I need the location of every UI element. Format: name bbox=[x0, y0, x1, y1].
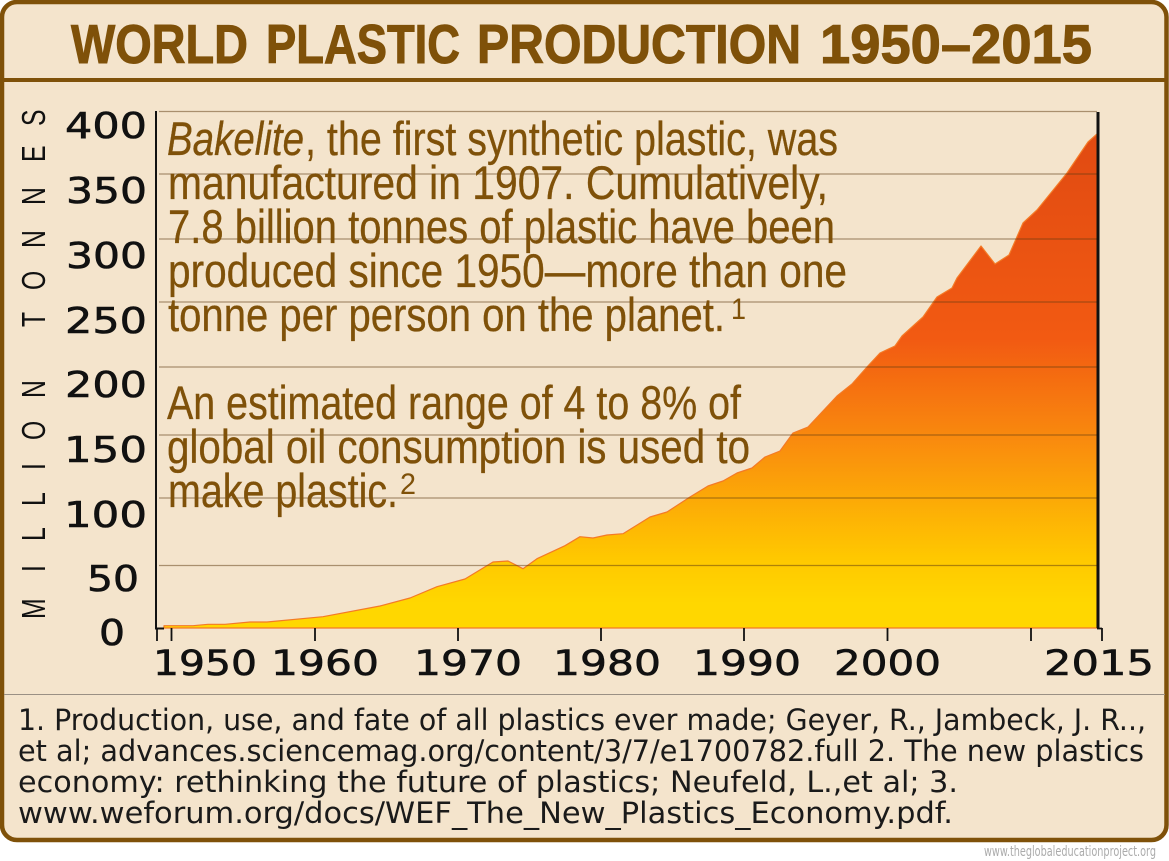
y axis labels: 250 bbox=[65, 301, 147, 342]
y axis labels bbox=[64, 106, 147, 654]
text block: Bakelite history: Bakelite bbox=[167, 112, 304, 165]
gridlines bbox=[159, 112, 1097, 566]
text block: oil consumption: An estimated range of 4 to 8% of bbox=[167, 376, 742, 429]
footer divider bbox=[4, 694, 1165, 696]
chart: production area bbox=[156, 111, 1102, 641]
title: PRODUCTION bbox=[477, 14, 801, 75]
y axis labels: 150 bbox=[64, 430, 147, 471]
x axis labels: 1990 bbox=[693, 644, 801, 684]
text block: Bakelite history: 1 bbox=[731, 293, 746, 326]
y axis labels: 100 bbox=[64, 495, 147, 536]
axes and ticks bbox=[156, 111, 1102, 641]
y axis labels: 0 bbox=[99, 613, 125, 654]
y axis labels: 400 bbox=[65, 106, 147, 147]
x axis labels: 1980 bbox=[553, 644, 661, 684]
title: WORLD bbox=[71, 14, 248, 75]
area series bbox=[164, 134, 1097, 628]
x axis labels: 2000 bbox=[834, 644, 941, 684]
footnotes: 1. Production, use, and fate of all plastics ever made; Geyer, R., Jambeck, J. R.., bbox=[18, 703, 1146, 737]
y axis labels: 200 bbox=[65, 365, 147, 406]
y axis labels: 350 bbox=[66, 171, 147, 212]
y axis labels: 50 bbox=[87, 559, 139, 600]
footnotes: www.weforum.org/docs/WEF_The_New_Plastics_Economy.pdf. bbox=[18, 796, 953, 830]
text block: Bakelite history: manufactured in 1907. Cumulatively, bbox=[168, 156, 828, 209]
x axis labels: 1960 bbox=[271, 644, 379, 684]
x axis labels: 1950 bbox=[153, 644, 257, 684]
text block: oil consumption bbox=[167, 376, 750, 517]
text block: oil consumption: make plastic. bbox=[168, 464, 398, 517]
text block: Bakelite history bbox=[167, 112, 847, 341]
title divider bbox=[4, 78, 1165, 82]
title: 1950–2015 bbox=[820, 14, 1092, 75]
title bbox=[71, 14, 1092, 75]
y axis labels: 300 bbox=[66, 236, 147, 277]
text block: oil consumption: global oil consumption is used to bbox=[167, 420, 750, 473]
footnotes: et al; advances.sciencemag.org/content/3/7/e1700782.full 2. The new plastics bbox=[18, 734, 1144, 768]
x axis labels bbox=[153, 644, 1154, 684]
text block: Bakelite history: tonne per person on the planet. bbox=[168, 288, 725, 341]
footnotes bbox=[18, 703, 1146, 830]
text block: oil consumption: 2 bbox=[400, 468, 416, 501]
y axis title: MILLION TONNES bbox=[17, 109, 53, 619]
text block: Bakelite history: 7.8 billion tonnes of plastic have been bbox=[168, 200, 835, 253]
x axis labels: 2015 bbox=[1044, 644, 1154, 684]
text block: Bakelite history: , the first synthetic plastic, was bbox=[305, 112, 838, 165]
title: PLASTIC bbox=[266, 14, 460, 75]
text block: Bakelite history: produced since 1950—more than one bbox=[168, 244, 847, 297]
x axis labels: 1970 bbox=[414, 644, 522, 684]
footnotes: economy: rethinking the future of plastics; Neufeld, L.,et al; 3. bbox=[18, 765, 958, 799]
